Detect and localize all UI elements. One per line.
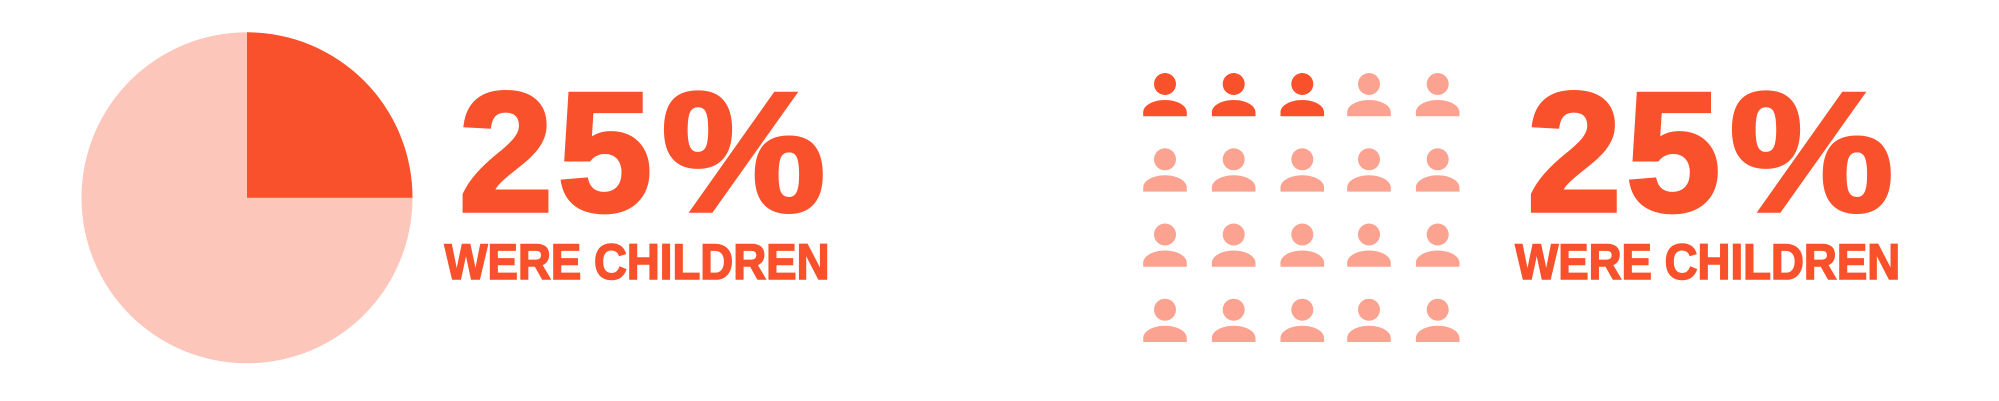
- big number right: [1527, 58, 1894, 248]
- caption left: WERE CHILDREN: [444, 234, 830, 290]
- pictogram: 20 people, 5 highlighted: [1143, 73, 1459, 342]
- big number right: 25: [1527, 58, 1721, 248]
- pie chart: 25 percent: [82, 32, 412, 363]
- big number left: 25: [459, 58, 652, 248]
- caption right: WERE CHILDREN: [1515, 234, 1900, 290]
- big number left: %: [662, 58, 826, 248]
- big number left: [459, 58, 826, 248]
- row 4: [1143, 299, 1459, 342]
- row 2: [1143, 148, 1459, 192]
- statistic: right 25% were children: [1515, 58, 1900, 290]
- statistic: left 25% were children: [444, 58, 830, 290]
- row 3: [1143, 224, 1459, 267]
- pie base: remaining 75 percent: [82, 32, 412, 363]
- pie slice: 25 percent: [247, 32, 412, 198]
- big number right: %: [1730, 58, 1894, 248]
- row 1: [1143, 73, 1459, 116]
